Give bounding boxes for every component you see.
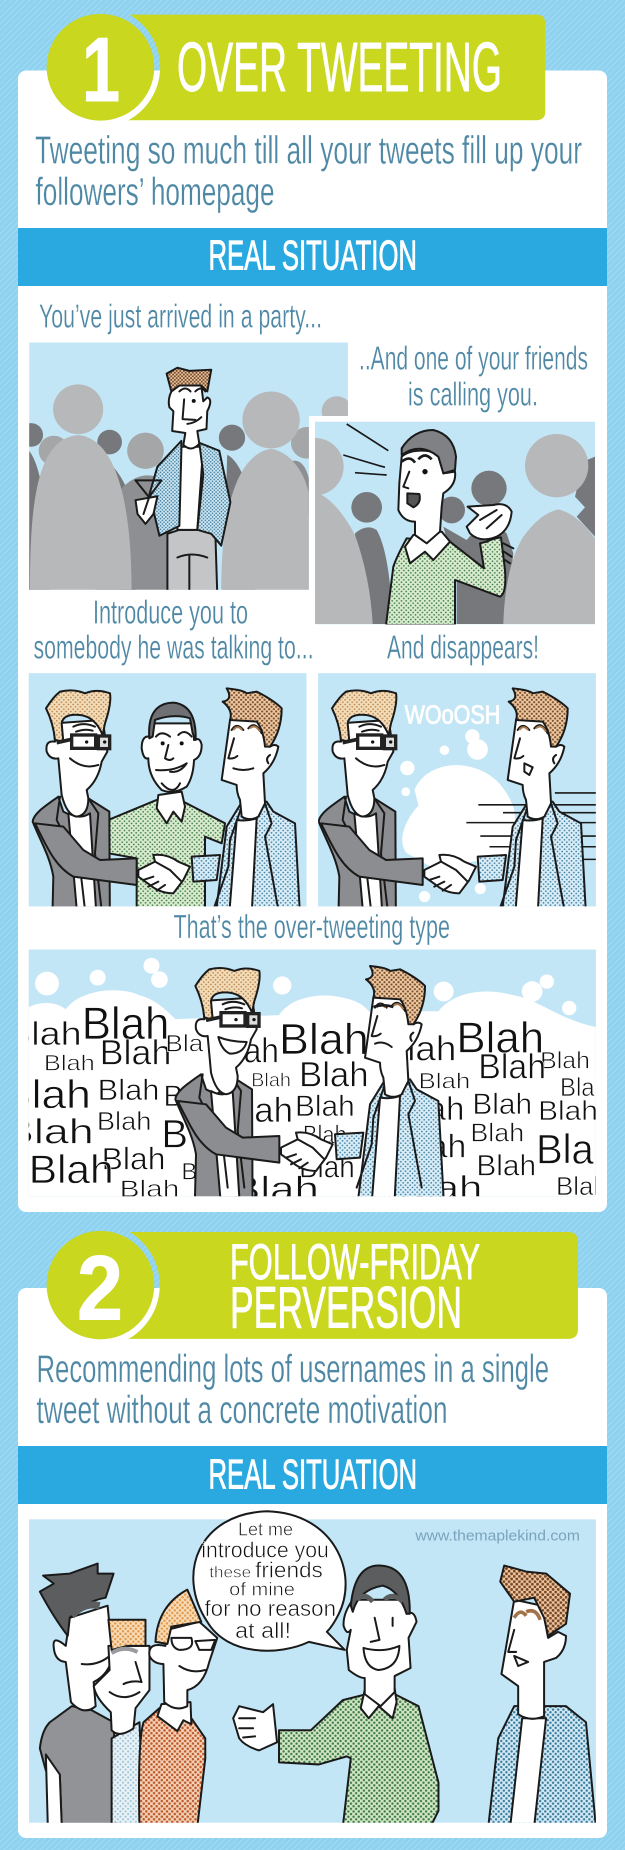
caption: and disappears: And disappears! [387, 628, 539, 666]
caption: over-tweeting type: That’s the over-tweeting type [174, 908, 450, 945]
character: friend with glasses in orange sweater [139, 1590, 217, 1827]
character: you in blazer [488, 1566, 596, 1827]
number 1: 1 [82, 20, 120, 121]
blah word cloud: Blah [231, 1169, 319, 1209]
description text: followers’ homepage [36, 171, 274, 214]
speech bubble: friends [255, 1558, 323, 1583]
speech bubble: for no reason [204, 1596, 336, 1621]
character: shouting friend [386, 430, 513, 625]
character: friend in green sweater [108, 703, 225, 920]
character: man with glasses, grinning [175, 968, 333, 1224]
blah word cloud: Blah [120, 1176, 179, 1203]
description text [35, 129, 582, 214]
blah word cloud: Blah [6, 1015, 82, 1053]
comic panel: man arriving at party [19, 342, 352, 593]
blah word cloud: Blah [399, 1128, 466, 1165]
caption: introduce you [34, 594, 314, 666]
icon: shout lines [343, 424, 388, 475]
speech bubble: these [209, 1565, 251, 1582]
comic panel: recommending friends [29, 1511, 596, 1827]
blah word cloud: Blah [538, 1095, 598, 1126]
panel: follow-friday perversion card [18, 1231, 607, 1838]
speech bubble: at all! [235, 1618, 291, 1643]
heading banner: follow-friday [47, 1231, 578, 1339]
blah word cloud: Blah [102, 1140, 165, 1176]
number 2: 2 [77, 1238, 123, 1340]
title: follow-friday perversion: PERVERSION [230, 1276, 462, 1341]
character: man with martini [136, 368, 230, 593]
character: you in blazer, annoyed [335, 966, 445, 1224]
real situation band: REAL SITUATION [208, 1450, 417, 1497]
blah word cloud: B [181, 1158, 197, 1185]
heading banner: over tweeting [47, 14, 545, 121]
blah word cloud: Blah [556, 1173, 608, 1201]
blah word cloud: Blah [82, 998, 169, 1049]
real situation band: REAL SITUATION [208, 232, 417, 279]
blah word cloud: Blah [98, 1074, 159, 1107]
caption: friend calling [359, 340, 588, 413]
blah word cloud: Bla [165, 1031, 204, 1058]
caption: arrived in a party: You’ve just arrived in a party... [39, 297, 322, 334]
blah word cloud: Blah [295, 1090, 355, 1123]
blah word cloud: Blah [399, 1169, 482, 1207]
blah word cloud: Blah [472, 1088, 532, 1121]
character: man in grey tee [40, 1564, 118, 1827]
source url: www.themaplekind.com [414, 1529, 580, 1545]
speech bubble: introduce you [201, 1537, 329, 1563]
blah word cloud: Blah [540, 1048, 590, 1075]
caption: introduce you: Introduce you to [93, 594, 248, 631]
blah word cloud: Blah [251, 1069, 291, 1091]
blah word cloud: B [161, 1113, 188, 1157]
blah word cloud: Blah [419, 1068, 470, 1093]
real situation band [18, 228, 607, 286]
smoke cloud [400, 729, 518, 902]
character: recommender in green sweater [233, 1566, 438, 1827]
character: blond friend [94, 1620, 149, 1827]
blah word cloud: Blah [44, 1051, 95, 1076]
blah word cloud: Blah [29, 1148, 114, 1192]
caption: friend calling: is calling you. [408, 376, 538, 413]
speed lines [466, 793, 596, 859]
character: man with glasses [32, 689, 191, 906]
panel: over tweeting card [2, 14, 616, 1224]
comic panel: friend vanishes [318, 673, 596, 906]
blah word cloud: Blah [399, 1090, 464, 1128]
blah word cloud: Blah [560, 1074, 608, 1102]
comic panel: introduction handshake [28, 673, 306, 906]
white speech cloud [29, 958, 596, 1196]
blah word cloud: Blah [536, 1126, 616, 1172]
blah word cloud [28, 1006, 596, 1196]
title: follow-friday perversion: FOLLOW-FRIDAY [230, 1234, 480, 1290]
title: follow-friday perversion [230, 1234, 480, 1341]
character: man with glasses [318, 689, 477, 906]
blah word cloud: Blah [303, 1122, 347, 1150]
speech bubble: Let me [238, 1519, 293, 1539]
blah word cloud: Blah [4, 1112, 94, 1152]
comic panel: friend calling you [286, 422, 595, 625]
blah word cloud: Blah [456, 1014, 544, 1063]
real situation band [18, 1446, 607, 1504]
character: you in blazer [190, 687, 300, 906]
sound effect: whoosh: WOoOSH [405, 699, 500, 729]
blah word cloud: Blah [215, 1031, 279, 1071]
blah word cloud: Blah [279, 1015, 369, 1064]
blah word cloud: Blah [478, 1047, 546, 1086]
blah word cloud: Blah [299, 1054, 369, 1094]
speech bubble: of mine [229, 1580, 295, 1600]
comic panel: blah blah [28, 950, 596, 1196]
blah word cloud: Blah [476, 1149, 536, 1182]
blah word cloud: Blah [97, 1108, 151, 1136]
white frame of calling panel [310, 416, 605, 628]
blah word cloud: Blah [383, 1029, 456, 1069]
description text [36, 1348, 549, 1432]
speech bubble [193, 1511, 346, 1651]
character: you in blazer, surprised [476, 687, 586, 906]
blah word cloud: Blah [100, 1033, 171, 1073]
blah word cloud: Blah [470, 1120, 524, 1148]
blah word cloud: Blah [223, 1090, 293, 1130]
caption: introduce you: somebody he was talking to... [34, 628, 314, 666]
blah word cloud: Blah [299, 1148, 355, 1184]
blah word cloud: Blah [2, 1073, 91, 1117]
blah word cloud: B [163, 1080, 183, 1113]
